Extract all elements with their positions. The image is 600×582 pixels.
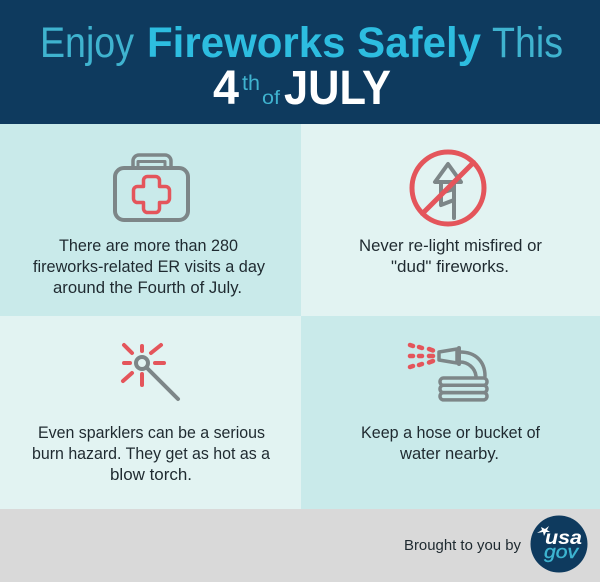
text: sparklers: [32, 424, 271, 484]
panel: sparklers: [0, 316, 301, 509]
logo: usa gov: usa: [545, 528, 582, 549]
text: sparklers: Even sparklers can be a serious: [38, 424, 265, 442]
footer band: [0, 509, 600, 582]
logo: usa gov: gov: [544, 542, 579, 562]
text: dud fireworks: [359, 237, 543, 276]
text: sparklers: burn hazard. They get as hot as a: [32, 445, 271, 463]
text: hose: Keep a hose or bucket of: [361, 424, 540, 442]
text: ER visits: fireworks-related ER visits a day: [33, 258, 266, 276]
title line 2: JULY: [284, 62, 391, 115]
panel: hose: [301, 316, 600, 509]
title line 1: This: [492, 19, 563, 67]
title line 2: 4: [213, 62, 239, 115]
text: hose: [361, 424, 540, 463]
icon: first aid kit: [115, 155, 188, 220]
title line 1: Fireworks Safely: [147, 19, 481, 67]
title line 2: th: [242, 72, 260, 95]
text: ER visits: [33, 237, 266, 297]
text: sparklers: blow torch.: [110, 466, 192, 484]
text: ER visits: There are more than 280: [59, 237, 238, 255]
panel: ER visits: [0, 124, 301, 316]
text: ER visits: around the Fourth of July.: [53, 279, 242, 297]
panel: dud fireworks: [301, 124, 600, 316]
text: dud fireworks: Never re-light misfired or: [359, 237, 543, 255]
logo: usa gov: [530, 516, 588, 572]
text: hose: water nearby.: [399, 445, 499, 463]
icon: sparkler: [123, 345, 178, 399]
icon: no firework: [412, 152, 484, 224]
icon: hose: [410, 345, 487, 400]
header band: [0, 0, 600, 124]
text: dud fireworks: "dud" fireworks.: [391, 258, 509, 276]
footer text: Brought to you by: [404, 538, 522, 554]
title line 1: [40, 19, 563, 67]
title line 1: Enjoy: [40, 19, 134, 67]
title line 2: [213, 62, 391, 115]
title line 2: of: [262, 88, 281, 109]
